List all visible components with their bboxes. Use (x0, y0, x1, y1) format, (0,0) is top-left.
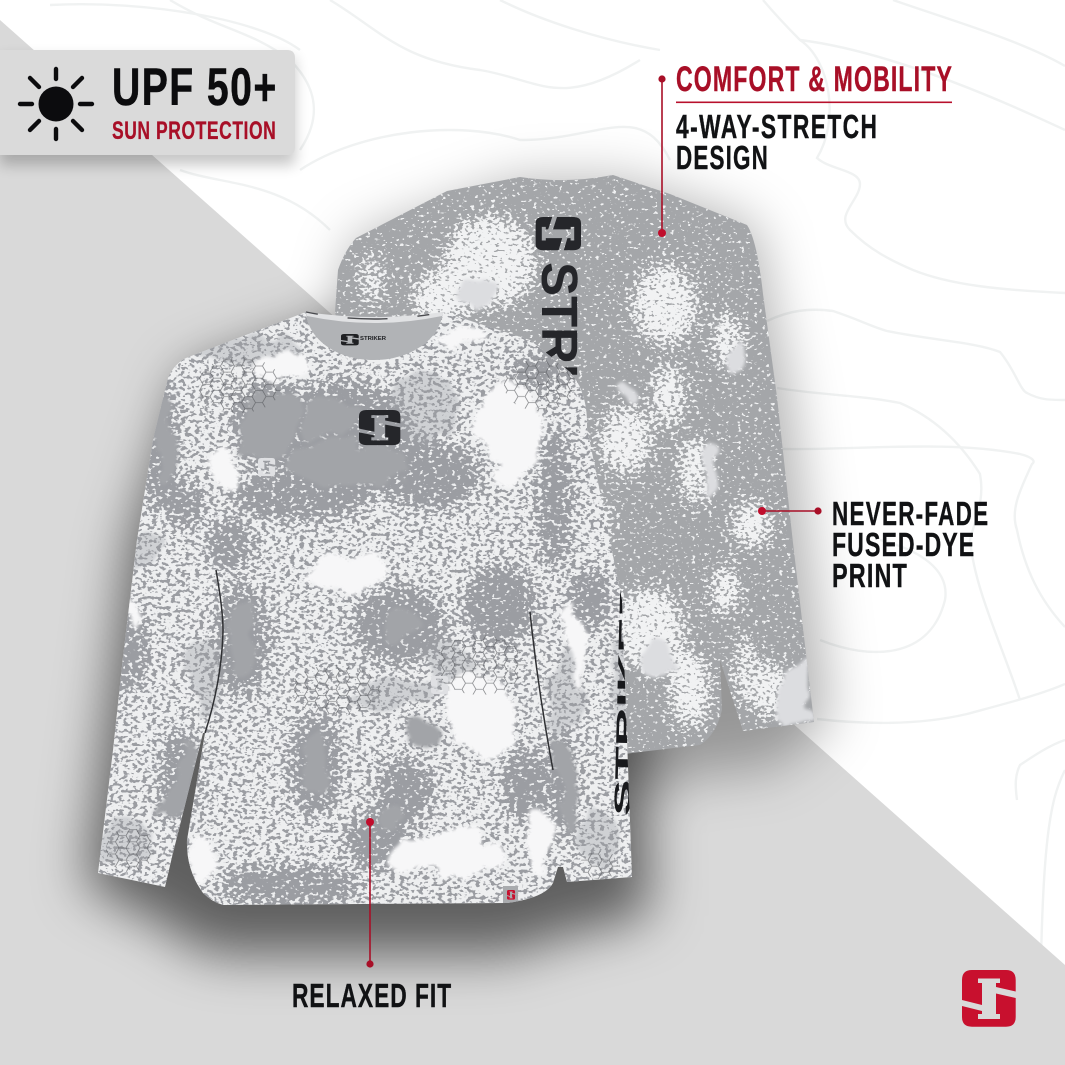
front print: white highlights (122, 330, 583, 886)
callout: never-fade print (758, 496, 988, 595)
callout text (676, 109, 877, 177)
UPF badge (0, 50, 295, 165)
callout text: RELAXED FIT (292, 978, 452, 1015)
front print: pale patches (100, 336, 639, 862)
hem tag (503, 886, 518, 903)
front print: honeycomb mesh (106, 357, 620, 879)
badge subtitle: SUN PROTECTION (112, 116, 276, 145)
callout text (832, 496, 988, 595)
back view of shirt (320, 165, 830, 765)
callout: comfort and mobility (658, 60, 952, 237)
callout text: PRINT (832, 558, 907, 595)
brand logo (962, 970, 1016, 1027)
callout text: FUSED-DYE (832, 527, 974, 564)
faint tone-on-tone logos (258, 458, 448, 694)
inner collar: STRIKER (360, 336, 386, 342)
front print: solid grey blocks (154, 389, 580, 834)
front print: grey speckle field (90, 300, 640, 920)
back print: pale patches (453, 281, 814, 728)
back print: light speckle areas (362, 216, 788, 740)
callout heading: COMFORT & MOBILITY (676, 60, 952, 99)
back vertical wordmark: STRIKER (531, 262, 588, 486)
seam shadows (205, 570, 553, 770)
front view of shirt (90, 300, 641, 920)
callout leader line (658, 75, 666, 237)
inner collar (306, 312, 443, 360)
back vertical logo (536, 217, 581, 250)
badge headline: UPF 50+ (112, 57, 276, 116)
icon: sun (20, 69, 92, 139)
shirt drop shadows (85, 180, 830, 955)
callout: relaxed fit (292, 818, 452, 1015)
callout text: NEVER-FADE (832, 496, 988, 533)
callout leader line (366, 818, 374, 968)
callout leader line (758, 507, 822, 515)
sleeve wordmark: STRIKER (609, 577, 641, 816)
chest logo (359, 410, 400, 445)
callout text: 4-WAY-STRETCH (676, 109, 877, 146)
callout text: DESIGN (676, 140, 768, 177)
